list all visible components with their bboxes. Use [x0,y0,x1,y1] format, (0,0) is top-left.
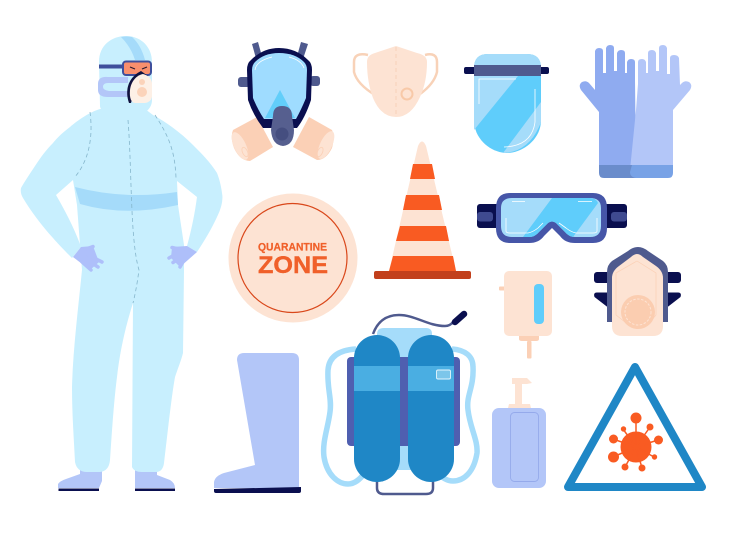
tank carry handle [377,480,433,494]
figure in protective suit [21,36,222,491]
figure goggles [99,62,151,75]
left glove [580,45,636,170]
virus icon [608,412,663,472]
rubber gloves [580,45,691,178]
goggle straps [477,204,627,228]
hood [99,36,152,118]
half-mask respirator [594,247,681,336]
traffic cone [374,142,471,279]
respirator straps [594,272,681,309]
gloves on hands [73,246,197,270]
top light block [377,328,432,360]
goggle lens [501,198,601,237]
quarantine zone sign: ZONE [258,252,328,279]
glove cuffs [599,165,636,178]
respirator frame [607,247,668,322]
face shield [464,54,549,153]
strap loop [98,77,128,97]
suit seams [74,112,176,303]
mask frame [247,48,312,128]
tall protective boot [214,353,301,493]
mask tabs [238,42,320,87]
light hoses [324,349,364,484]
right tank [408,335,454,482]
mask nose tube [271,106,294,146]
gas mask [228,42,338,162]
wall dispenser [499,271,552,358]
respirator cup [612,254,663,336]
sanitizer pump bottle [492,378,546,488]
biohazard warning triangle [568,367,702,487]
air hose and nozzle [373,315,453,334]
mask cartridges [228,117,338,162]
hood stripe [121,36,145,60]
mask lens [252,53,307,119]
suit body [21,109,222,472]
breathing apparatus tanks [324,314,477,494]
cloth face mask [354,46,437,117]
belt [75,187,178,211]
left tank [354,335,400,482]
sign text: QUARANTINE [258,242,327,254]
goggle frame [496,193,607,243]
shoes [58,470,175,491]
figure respirator [127,71,152,103]
right glove [630,45,691,170]
safety goggles [477,193,627,243]
back plate [347,357,460,446]
quarantine zone sign [228,194,358,322]
